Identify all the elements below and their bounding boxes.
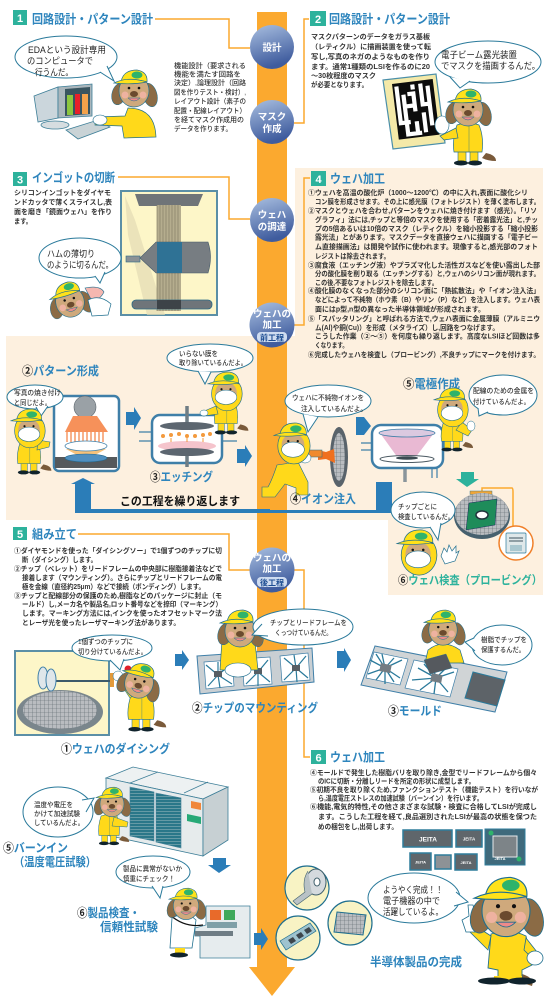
process node: back end: 後工程 xyxy=(260,578,284,588)
dicing machine xyxy=(15,651,114,735)
heading 6 xyxy=(311,750,385,764)
exposure machine xyxy=(54,396,119,471)
speech bubble: 1個ずつのチップに xyxy=(78,637,133,646)
speech bubble: しているんだよ。 xyxy=(34,819,84,827)
speech bubble: チップとリードフレームを xyxy=(270,619,347,627)
lead frame xyxy=(197,648,314,694)
heading 2: 2 xyxy=(315,14,321,26)
speech bubble: 温度や電圧を xyxy=(34,800,73,809)
speech bubble: 活躍しているよ。 xyxy=(383,906,443,917)
process node: mask: 作成 xyxy=(262,123,282,135)
speech bubble: いらない膜を xyxy=(179,349,218,358)
speech bubble: でマスクを描画するんだ。 xyxy=(441,60,540,71)
sputtering chamber xyxy=(361,425,443,482)
speech bubble: くっつけているんだ。 xyxy=(275,629,332,637)
heading 1: 回路設計・パターン設計 xyxy=(32,12,153,26)
description text: を経てマスク作成用の xyxy=(174,115,244,124)
masked worker with glove xyxy=(397,530,459,575)
description text: 配置・配線レイアウト） xyxy=(174,106,246,115)
JEITA chips: JEITA xyxy=(494,856,506,861)
masked worker with ion gun xyxy=(262,423,322,497)
step: electrode formation xyxy=(361,375,537,487)
description text: この後,不要なフォトレジストを除去します。 xyxy=(315,278,438,287)
heading 1: 1 xyxy=(17,13,23,25)
description text xyxy=(311,32,431,89)
description text: ム(Al)や銅(Cu)）を形成（メタライズ）し,回路をつなげます。 xyxy=(315,323,499,332)
description text: ールド）し,メーカ名や製品名,ロット番号などを捺印（マーキング） xyxy=(22,600,222,608)
wafer probe station xyxy=(454,488,533,560)
ingot slicing machine xyxy=(121,191,217,315)
description text: ①ダイヤモンドを使った「ダイシングソー」で1個ずつのチップに切 xyxy=(14,546,222,555)
process node: front end: 加工 xyxy=(262,319,282,331)
reticle plate xyxy=(383,74,445,149)
description text: 露光法」とがあります。マスクデータを直接ウェハに描画する「電子ビー xyxy=(315,232,538,242)
step title: ③モールド xyxy=(388,704,442,718)
speech bubble: 付けているんだよ。 xyxy=(473,397,530,406)
mascot at machine xyxy=(112,658,168,731)
etching chamber xyxy=(139,406,237,467)
arrow xyxy=(208,858,231,873)
step title: ②パターン形成 xyxy=(22,363,99,378)
speech bubble: のように切るんだ。 xyxy=(47,260,113,270)
description text: レジストは除去されます。 xyxy=(315,252,390,260)
panel 4: wafer processing xyxy=(308,171,540,359)
step: etching xyxy=(139,344,253,484)
description text: ⑥機能,電気的特性,その他さまざまな試験・検査に合格してLSIが完成し xyxy=(310,802,537,811)
step title xyxy=(3,841,96,869)
description text: データを作ります。 xyxy=(174,124,232,133)
step title: ①ウェハのダイシング xyxy=(61,741,170,756)
speech bubble xyxy=(23,787,94,837)
step title: ④イオン注入 xyxy=(290,491,356,506)
description text: ⑥完成したウェハを検査し（プロービング）,不良チップにマークを付けます。 xyxy=(308,350,540,359)
description text: 図を作りテスト・検討）, xyxy=(174,88,246,96)
heading 3: 3 xyxy=(17,174,23,186)
step: wafer probing xyxy=(391,488,542,587)
description text: します。マーキング方法には,インクを使ったオフセットマーク法 xyxy=(22,608,222,618)
description text xyxy=(14,188,112,226)
heading 4 xyxy=(311,171,385,186)
speech bubble xyxy=(7,385,63,416)
description text: ら,温度電圧ストレスの加速試験（バーンイン）を行います。 xyxy=(318,794,483,802)
speech bubble: ようやく完成！！ xyxy=(383,884,443,895)
description text: ⑤「スパッタリング」と呼ばれる方法で,ウェハ表面に金属薄膜（アルミニウ xyxy=(308,314,540,323)
speech bubble: 電子機器の中で xyxy=(383,895,440,906)
panel 3: ingot slicing xyxy=(13,170,217,324)
step: molding xyxy=(361,610,532,718)
description text: ③チップと配線部分の保護のため,樹脂などのパッケージに封止（モ xyxy=(14,591,222,600)
speech bubble: 保護するんだ。 xyxy=(481,645,525,654)
step: ion implantation xyxy=(262,385,371,506)
speech bubble xyxy=(252,609,353,645)
description text: こうした作業（②～⑤）を何度も繰り返します。高度なLSIほど回数は多 xyxy=(315,332,540,340)
description text: 写し,写真のネガのようなものを作り xyxy=(311,52,430,61)
process node: design: 設計 xyxy=(262,42,282,54)
heading 4: ウェハ加工 xyxy=(330,172,385,186)
speech bubble: 行うんだ。 xyxy=(35,66,73,78)
speech bubble xyxy=(39,238,121,283)
speech bubble: ウェハに不純物イオンを xyxy=(292,393,364,402)
process node: wafer procurement: ウェハ xyxy=(258,210,287,221)
description text: ます。こうした工程を経て,良品選別されたLSIが最高の状態を保つた xyxy=(318,812,537,821)
heading 1 xyxy=(13,10,153,26)
process node: front end: ウェハの xyxy=(253,309,291,320)
panel 1: circuit design xyxy=(13,10,246,139)
speech bubble: ハムの薄切り xyxy=(47,248,95,259)
speech bubble: 検査しているんだ。 xyxy=(398,512,454,521)
arrow xyxy=(254,928,268,950)
mascot holding mold xyxy=(420,610,468,674)
molded lead frame strip xyxy=(361,646,507,712)
description text: のICに切断・分離しリードを所定の形状に成型します。 xyxy=(318,776,475,786)
description text: ②マスクとウェハを合わせ,パターンをウェハに焼き付けます（感光）。「リソ xyxy=(308,206,537,215)
speech bubble xyxy=(391,492,455,540)
speech bubble: EDAという設計専用 xyxy=(28,44,106,55)
description text: ム直接描画法」は開発や試作に使われます。現像すると,感光部のフォト xyxy=(315,242,538,251)
description text: ～30枚程度のマスク xyxy=(311,71,376,80)
process node: back end: 加工 xyxy=(262,563,282,575)
arrow xyxy=(356,417,371,435)
masked worker xyxy=(11,409,51,474)
speech bubble: 製品に異常がないか xyxy=(123,864,182,873)
description text: 機能を満たす回路を xyxy=(174,70,241,78)
connector lines xyxy=(78,19,310,757)
step title: 信頼性試験 xyxy=(100,919,158,934)
closing title: 半導体製品の完成 xyxy=(370,954,462,969)
description text: ①ウェハを高温の酸化炉（1000～1200℃）の中に入れ,表面に酸化シリ xyxy=(308,188,528,197)
speech bubble xyxy=(435,41,541,88)
description text xyxy=(308,188,540,359)
mascot mounting chip xyxy=(215,610,266,677)
arrow xyxy=(126,407,141,430)
description text: 機能設計（要求される xyxy=(174,61,246,70)
speech bubble xyxy=(116,856,190,898)
process node: back end xyxy=(250,548,294,592)
description text xyxy=(14,546,222,627)
panel 6: finishing xyxy=(276,750,547,986)
description text: 極を金線（直径約25μm）などで接続（ボンディング）します。 xyxy=(22,582,205,591)
description text: ⑤初期不良を取り除くため,ファンクションテスト（機能テスト）を行いなが xyxy=(310,785,538,794)
burn-in oven xyxy=(106,767,228,856)
speech bubble: のコンピュータで xyxy=(27,56,93,66)
step title: ⑥製品検査・ xyxy=(77,905,140,920)
description text: ンドカッタで薄くスライスし,表 xyxy=(14,198,112,206)
panel: wafer processing background xyxy=(6,168,543,595)
heading 3 xyxy=(13,170,115,186)
heading 5 xyxy=(13,526,77,542)
process node: back end: ウェハの xyxy=(253,553,291,564)
mascot with ham and glove xyxy=(42,276,111,324)
description text: ます。 xyxy=(14,218,32,226)
heading 2: 回路設計・パターン設計 xyxy=(329,12,450,26)
description text: 面にはp型,n型の異なった半導体領域が形成されます。 xyxy=(315,304,485,314)
process node: wafer procurement xyxy=(250,198,294,242)
JEITA chips: JEITA xyxy=(460,860,472,865)
description text: めの梱包をし,出荷します。 xyxy=(318,822,398,831)
product circle: memory module xyxy=(276,916,320,960)
speech bubble: 配線のための金属を xyxy=(473,386,534,395)
arrow xyxy=(456,472,479,487)
speech bubble: 注入しているんだよ。 xyxy=(301,404,367,413)
description text: （レティクル）に描画装置を使って転 xyxy=(311,42,431,51)
description text: プの5倍あるいは10倍のマスク（レティクル）を縮小投影する「縮小投影 xyxy=(315,224,538,233)
description text: グラフィ」法には,チップと等倍のマスクを使用する「密着露光法」と,チッ xyxy=(315,215,538,224)
heading 6: 6 xyxy=(315,752,322,764)
description text: ③腐食液（エッチング液）やプラズマ化した活性ガスなどを使い露出した部 xyxy=(308,260,540,270)
step: wafer dicing xyxy=(15,635,189,756)
speech bubble: 慎重にチェック！ xyxy=(123,874,175,883)
JEITA chips xyxy=(403,829,525,870)
JEITA chips: JEITA xyxy=(415,860,426,864)
console xyxy=(195,906,250,958)
mascot holding reticle xyxy=(435,89,496,166)
mascot at oven xyxy=(92,787,133,845)
mascot pointing xyxy=(462,877,547,986)
process node: design xyxy=(250,25,294,69)
heading 6: ウェハ加工 xyxy=(330,750,385,764)
step: product inspection xyxy=(77,856,268,958)
arrow xyxy=(237,445,252,467)
description text: とレーザ光を使ったレーザマーキング法があります。 xyxy=(22,618,180,627)
speech bubble xyxy=(72,635,152,670)
JEITA chips: JEITA xyxy=(463,836,476,842)
speech bubble: 取り除いているんだよ。 xyxy=(179,358,247,367)
description text: ④モールドで発生した樹脂バリを取り除き,金型でリードフレームから個々 xyxy=(310,768,537,777)
panel 2: mask pattern xyxy=(310,11,541,166)
repeat loop arrow xyxy=(71,478,392,513)
description text: ④酸化膜のなくなった部分のシリコン面に「熱拡散法」や「イオン注入法」 xyxy=(308,286,540,295)
step title: ②チップのマウンティング xyxy=(192,700,318,715)
repeat label: この工程を繰り返します xyxy=(120,494,240,508)
heading 4: 4 xyxy=(315,174,322,186)
speech bubble xyxy=(15,36,117,81)
panel 5: assembly xyxy=(13,526,222,627)
arrow xyxy=(175,650,189,670)
speech bubble xyxy=(167,344,253,384)
mascot at keyboard xyxy=(93,70,160,138)
description text: レイアウト設計（素子の xyxy=(174,96,246,106)
description text: くなります。 xyxy=(315,340,348,350)
speech bubble: と同じだよ。 xyxy=(14,399,51,407)
step title: ⑤バーンイン xyxy=(3,841,68,855)
process node: wafer procurement: の調達 xyxy=(258,221,287,233)
product circle: chip tray xyxy=(328,901,372,945)
mascot in white coat xyxy=(165,888,208,958)
masked worker xyxy=(434,388,475,451)
description text: 断（ダイシング）します。 xyxy=(22,555,97,564)
speech bubble: チップごとに xyxy=(398,502,437,511)
description text: が必要となります。 xyxy=(311,80,368,89)
central process arrow xyxy=(249,12,295,996)
speech bubble xyxy=(465,625,532,665)
speech bubble: 切り分けているんだよ。 xyxy=(78,647,147,656)
step title xyxy=(77,905,158,934)
description text: マスクパターンのデータをガラス基板 xyxy=(311,32,430,41)
heading 5: 組み立て xyxy=(32,526,77,542)
speech bubble: かけて加速試験 xyxy=(34,809,80,818)
description text xyxy=(174,61,246,133)
speech bubble: 樹脂でチップを xyxy=(481,635,527,644)
speech bubble: 写真の焼き付け xyxy=(14,388,61,397)
arrow xyxy=(337,648,351,672)
description text: ます。通常1種類のLSIを作るのに20 xyxy=(311,62,430,71)
step title: ③エッチング xyxy=(150,469,213,484)
process node: mask: マスク xyxy=(258,112,286,123)
icon: computer xyxy=(34,84,110,139)
step title: （温度電圧試験） xyxy=(14,854,96,869)
masked worker xyxy=(200,372,248,434)
description text: シリコンインゴットをダイヤモ xyxy=(14,188,111,197)
JEITA chips: JEITA xyxy=(419,836,437,844)
speech bubble xyxy=(285,385,371,432)
process node: front end: 前工程 xyxy=(260,332,284,342)
process node: front end xyxy=(250,302,294,348)
step: burn-in xyxy=(3,767,231,873)
product circle: tape reel xyxy=(285,866,329,910)
heading 5: 5 xyxy=(17,529,23,541)
process node: mask xyxy=(250,100,294,144)
description text: 接着します（マウンティング）。さらにチップとリードフレームの電 xyxy=(22,573,222,582)
step: chip mounting xyxy=(192,609,353,715)
description text: 面を磨き「鏡面ウェハ」を作り xyxy=(14,207,112,216)
speech bubble xyxy=(469,375,537,416)
ion target disk xyxy=(318,427,348,487)
description text xyxy=(310,768,538,831)
description text: ②チップ（ペレット）をリードフレームの中央部に樹脂接着法などで xyxy=(14,564,222,573)
heading 3: インゴットの切断 xyxy=(32,170,115,185)
speech bubble xyxy=(368,873,468,923)
speech bubble: 電子ビーム露光装置 xyxy=(441,49,517,60)
step title: ⑤電極作成 xyxy=(403,376,460,391)
description text: 決定）,論理設計（回路 xyxy=(174,78,246,87)
step: pattern formation xyxy=(7,363,141,474)
